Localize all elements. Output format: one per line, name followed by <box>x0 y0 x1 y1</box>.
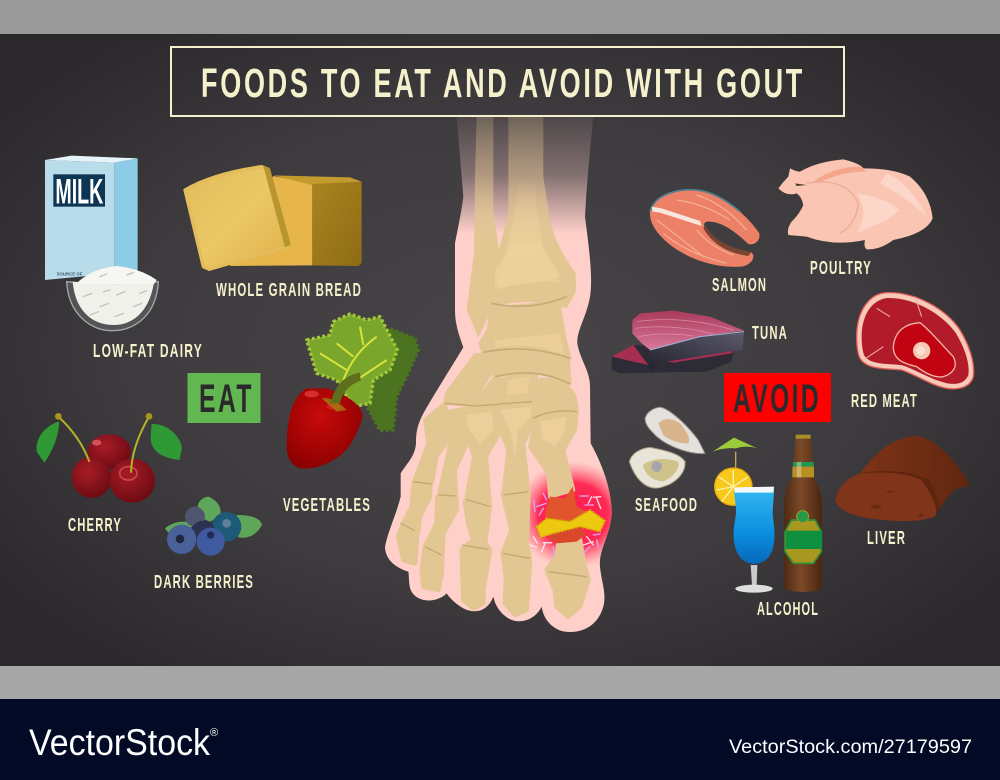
icon: milk carton <box>45 156 138 280</box>
icon: oysters <box>629 407 705 488</box>
foot skeleton illustration <box>385 117 632 632</box>
footer logo: VectorStock <box>29 722 210 763</box>
icon: cherries <box>36 413 182 503</box>
label: WHOLE GRAIN BREAD <box>216 280 362 300</box>
icon: milk carton: SOURCE OF <box>57 272 83 277</box>
footer band: ® <box>210 727 218 739</box>
icon: cottage cheese bowl <box>67 266 158 331</box>
gout crystals <box>530 493 601 557</box>
label: DARK BERRIES <box>154 572 254 592</box>
icon: whole grain bread <box>185 166 362 269</box>
icon: dark berries <box>165 497 262 556</box>
icon: blue cocktail <box>713 438 774 593</box>
label: SALMON <box>712 275 767 295</box>
label: VEGETABLES <box>283 495 371 515</box>
icon: red meat <box>857 293 974 389</box>
foot skin outline <box>385 117 612 632</box>
badge: AVOID <box>724 373 831 422</box>
footer band: VectorStock.com/27179597 <box>729 737 972 758</box>
badge: EAT <box>188 373 260 423</box>
top grey band <box>0 0 1000 34</box>
inflamed joint <box>545 487 590 523</box>
leg bones <box>467 117 576 337</box>
label: LOW-FAT DAIRY <box>93 341 203 361</box>
label: TUNA <box>752 323 788 343</box>
icon: raw poultry <box>778 159 933 249</box>
uric acid deposit <box>537 510 605 537</box>
label: SEAFOOD <box>635 495 698 515</box>
ankle and tarsal bones <box>445 301 577 418</box>
label: CHERRY <box>68 515 122 535</box>
icon: tuna steak <box>612 311 744 373</box>
icon: kale and bell pepper <box>287 314 418 469</box>
label: ALCOHOL <box>757 599 819 619</box>
label: RED MEAT <box>851 391 918 411</box>
icon: beer bottle <box>784 435 822 592</box>
footer band <box>0 699 1000 780</box>
icon: milk carton: MILK <box>55 172 104 211</box>
icon: salmon steak <box>650 190 760 267</box>
icon: liver <box>835 436 970 521</box>
badge: EAT: EAT <box>199 377 254 421</box>
label: LIVER <box>867 528 906 548</box>
title <box>171 47 844 116</box>
label: POULTRY <box>810 258 872 278</box>
lower grey band <box>0 666 1000 699</box>
inflammation glow <box>529 464 612 565</box>
badge: AVOID: AVOID <box>733 377 821 421</box>
toe phalanges <box>398 484 588 617</box>
metatarsal bones <box>413 403 577 505</box>
